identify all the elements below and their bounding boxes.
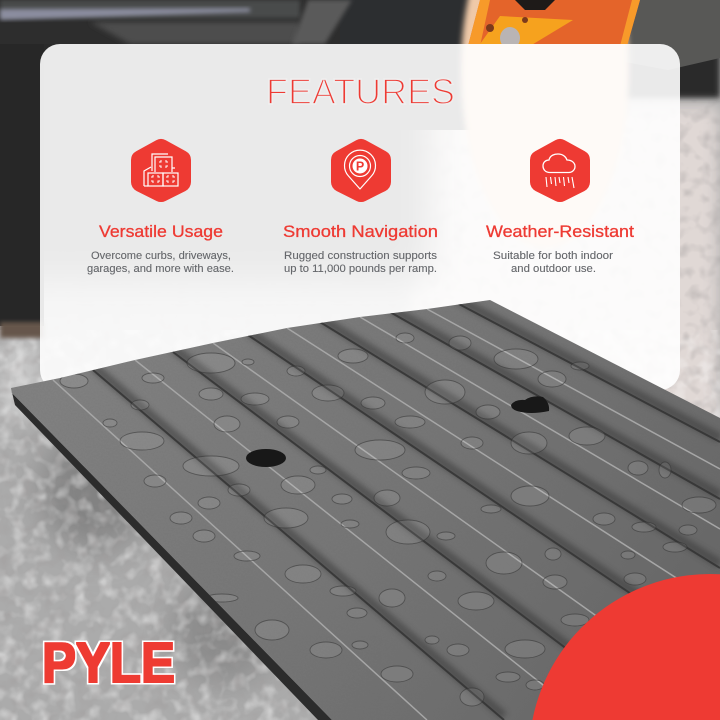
heading: Versatile Usage (99, 222, 223, 241)
description: garages, and more with ease. (87, 263, 234, 275)
hole: right mounting hole (511, 396, 549, 413)
corner accent: red circle (532, 574, 720, 720)
feature: versatile usage (87, 149, 234, 275)
icon: parking pin on red hexagon (341, 149, 381, 192)
panel: translucent white card (40, 44, 680, 390)
description (284, 250, 437, 275)
ramp grooves and ridges (0, 290, 720, 720)
heading: Smooth Navigation (283, 222, 438, 241)
description: Rugged construction supports (284, 250, 437, 262)
heading: Weather-Resistant (486, 222, 634, 241)
ramp surface (11, 300, 720, 720)
description (493, 250, 613, 275)
ramp side edge (11, 388, 332, 720)
description: and outdoor use. (511, 263, 596, 275)
wheel seen through panel (461, 0, 629, 248)
description: up to 11,000 pounds per ramp. (284, 263, 437, 275)
icon: parking pin on red hexagon: P (356, 160, 364, 174)
description: Overcome curbs, driveways, (91, 250, 231, 262)
feature: weather-resistant (486, 149, 634, 275)
hole: left mounting hole (246, 449, 286, 467)
title: FEATURES (266, 71, 455, 112)
description (87, 250, 234, 275)
orange wheel (468, 0, 640, 44)
icon: buildings on red hexagon (141, 149, 181, 192)
icon: rain cloud on red hexagon (540, 149, 580, 192)
feature: smooth navigation (283, 149, 438, 275)
right car body (610, 50, 720, 98)
product: black rubber ramp with water droplets (0, 290, 720, 720)
logo: Pyle: PYLE (42, 631, 175, 695)
dark car underbody (0, 0, 430, 280)
water droplets (60, 333, 716, 706)
description: Suitable for both indoor (493, 250, 613, 262)
